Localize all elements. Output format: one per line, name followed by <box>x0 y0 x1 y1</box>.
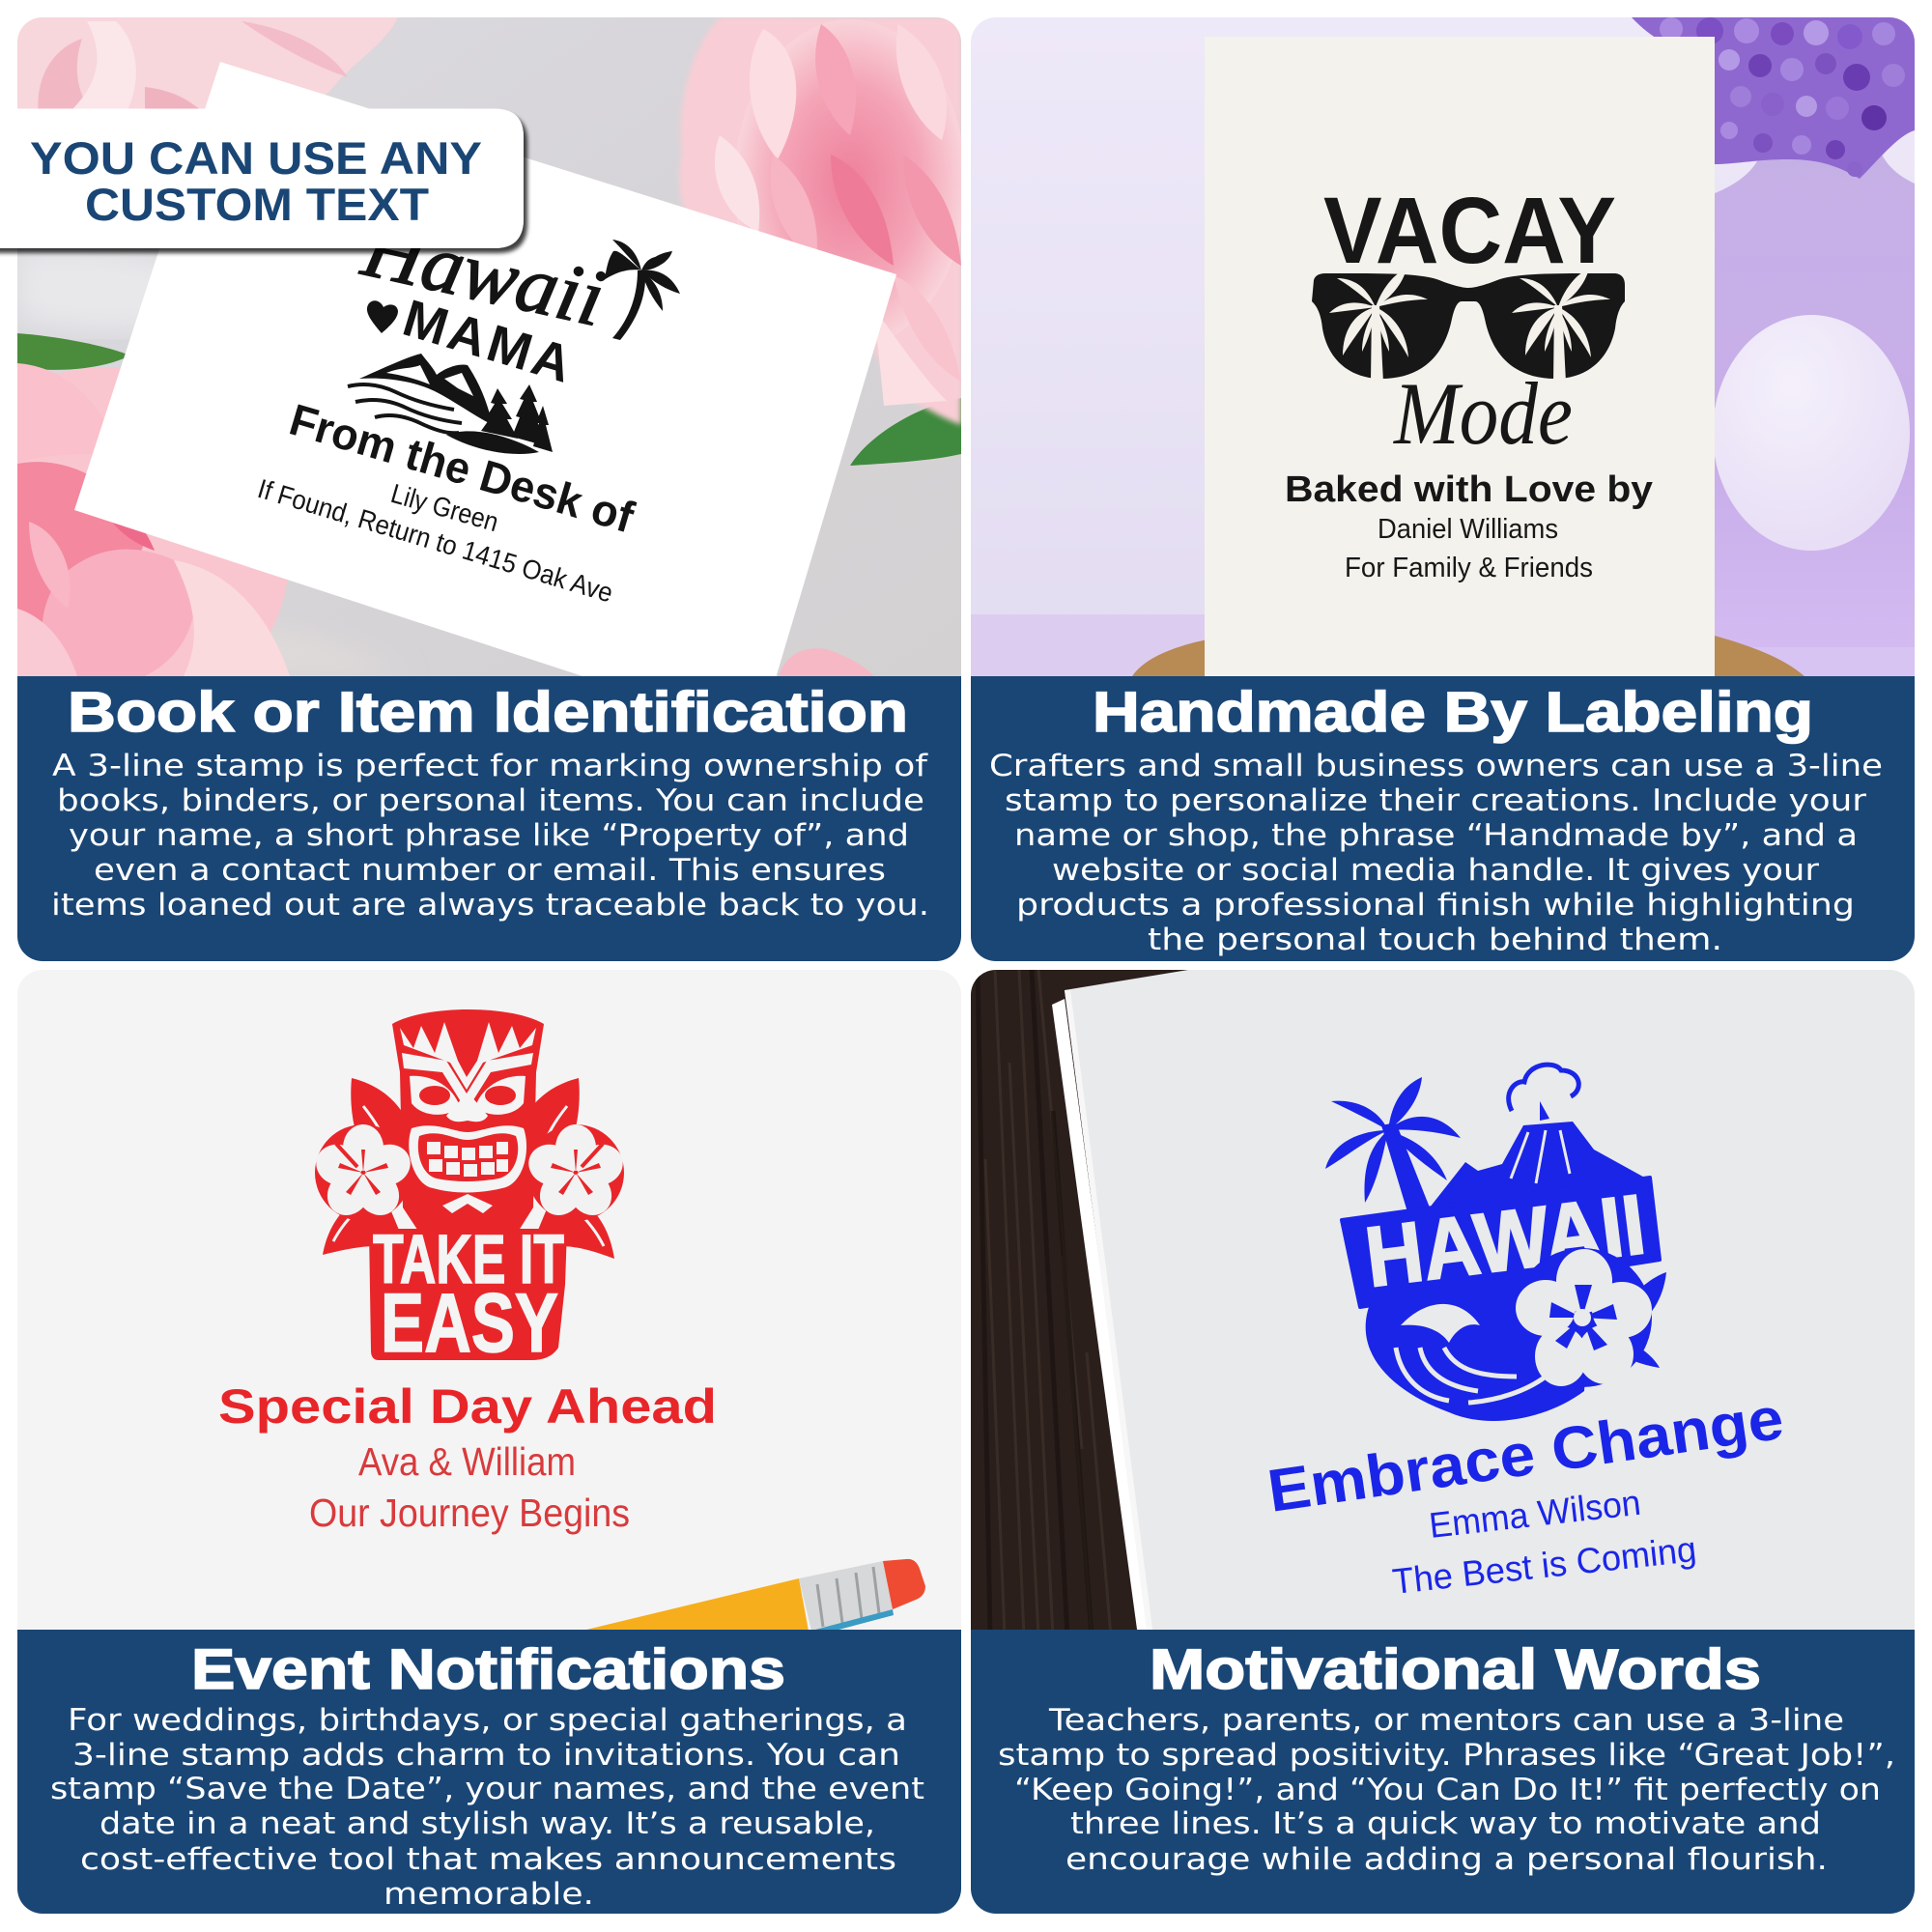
white stamped card <box>74 62 896 688</box>
stamp line: Embrace Change: Embrace Change <box>1264 1385 1787 1525</box>
stamp line: Lily Green: Lily Green <box>387 478 501 537</box>
stamp line: Our Journey Begins: Our Journey Begins <box>309 1491 630 1535</box>
word VACAY: VACAY <box>1323 178 1616 283</box>
body text <box>998 1703 1895 1877</box>
caption band <box>971 1630 1915 1915</box>
tiki mask icon <box>311 1009 628 1370</box>
script word Hawaii: Hawaii <box>355 204 612 344</box>
nose <box>446 1096 488 1122</box>
volcano smoke icon <box>1509 1065 1578 1111</box>
photo: peonies and stamped card <box>17 17 961 676</box>
photo: paper with pencil <box>17 970 961 1636</box>
mouth <box>409 1125 526 1192</box>
body text: stamp to spread positivity. Phrases like “Great Job!”, <box>998 1738 1895 1773</box>
top-right peony <box>679 17 961 425</box>
heading: Motivational Words <box>1150 1638 1761 1701</box>
head <box>392 1009 544 1241</box>
body text: A 3-line stamp is perfect for marking ownership of <box>52 749 928 783</box>
leaves <box>351 1078 415 1188</box>
stamp impression: Hawaii <box>1264 1065 1787 1602</box>
stamp impression: Vacay Mode <box>1285 178 1653 583</box>
photo: paper on dark wood <box>971 966 1927 1636</box>
stamp line: Special Day Ahead: Special Day Ahead <box>218 1379 717 1434</box>
stamp line: If Found: If Found, Return to 1415 Oak Ave <box>254 473 616 609</box>
palm tree icon <box>1325 1077 1461 1215</box>
body text: “Keep Going!”, and “You Can Do It!” fit perfectly on <box>1014 1773 1881 1807</box>
body text: 3-line stamp adds charm to invitations. You can <box>72 1738 900 1773</box>
body text: name or shop, the phrase “Handmade by”, and a <box>1014 818 1858 853</box>
panel: handmade by labeling <box>971 17 1915 961</box>
body text: books, binders, or personal items. You can include <box>57 783 924 818</box>
body text: your name, a short phrase like “Property of”, and <box>69 818 909 853</box>
photo: vase, flowers and canvas <box>971 17 1915 684</box>
pencil icon <box>586 1559 925 1630</box>
volcano icon <box>1430 1122 1650 1236</box>
stamp impression: Take It Easy tiki <box>218 1009 717 1535</box>
stamp line: Ava and William: Ava & William <box>358 1439 576 1484</box>
lower-left peony <box>17 367 288 676</box>
word HAWAII: HAWAII <box>1360 1176 1650 1305</box>
hair spikes <box>400 1022 536 1090</box>
body text: stamp to personalize their creations. Include your <box>1005 783 1866 818</box>
callout: you can use any custom text: CUSTOM TEXT <box>85 179 429 230</box>
caption band <box>17 676 961 961</box>
body text: website or social media handle. It gives your <box>1052 853 1819 888</box>
body text <box>50 1703 924 1912</box>
stamp line: Daniel Williams: Daniel Williams <box>1378 514 1558 545</box>
purple flowers <box>1632 17 1915 179</box>
body text: encourage while adding a personal flourish. <box>1065 1842 1828 1877</box>
panel: motivational words <box>971 966 1927 1915</box>
body text: stamp “Save the Date”, your names, and the event <box>50 1772 924 1806</box>
panel: book or item identification <box>0 17 966 961</box>
heading: Event Notifications <box>191 1638 785 1701</box>
body text: three lines. It’s a quick way to motivate and <box>1070 1806 1821 1841</box>
body text: Teachers, parents, or mentors can use a 3-line <box>1048 1703 1844 1738</box>
stamp line: For Family and Friends: For Family & Friends <box>1345 553 1593 583</box>
word TAKE IT: TAKE IT <box>373 1222 564 1298</box>
script word Mode: Mode <box>1392 364 1573 463</box>
stamp line: From the Desk of: From the Desk of <box>284 394 640 543</box>
body text: For weddings, birthdays, or special gatherings, a <box>68 1703 907 1738</box>
stamp impression: Hawaii Mama <box>258 240 680 601</box>
body text <box>989 749 1883 957</box>
stamp line: Baked with Love by: Baked with Love by <box>1285 469 1653 510</box>
body text: memorable. <box>384 1877 594 1912</box>
caption band <box>17 1630 961 1915</box>
top-left peony <box>17 17 398 119</box>
green leaves <box>17 333 130 370</box>
hibiscus flower icon <box>1513 1248 1666 1406</box>
callout: you can use any custom text <box>0 108 524 248</box>
body text: the personal touch behind them. <box>1148 923 1722 957</box>
body text: items loaned out are always traceable back to you. <box>51 888 929 923</box>
mountain and trees icon <box>348 354 553 454</box>
small bottom-right flower <box>779 648 874 676</box>
word EASY: EASY <box>381 1277 558 1370</box>
text plate <box>369 1229 567 1360</box>
Hawaii banner <box>1342 1178 1660 1307</box>
stamp line: The Best is Coming: The Best is Coming <box>1390 1529 1698 1602</box>
hibiscus flowers <box>311 1124 415 1224</box>
body text: date in a neat and stylish way. It’s a reusable, <box>99 1806 875 1841</box>
palm tree icon <box>604 240 680 340</box>
sunglasses icon <box>1312 269 1625 383</box>
word MAMA: MAMA <box>397 289 578 394</box>
body text: Crafters and small business owners can use a 3-line <box>989 749 1883 783</box>
body text <box>51 749 929 923</box>
eyes <box>410 1076 460 1115</box>
heading: Book or Item Identification <box>68 681 908 744</box>
stamp line: Emma Wilson: Emma Wilson <box>1427 1483 1643 1546</box>
panel: event notifications <box>17 970 961 1915</box>
purple vase <box>1715 145 1915 681</box>
heart icon <box>367 300 398 333</box>
canvas <box>1205 37 1715 684</box>
heading: Handmade By Labeling <box>1093 681 1813 744</box>
body text: even a contact number or email. This ensures <box>94 853 886 888</box>
callout: you can use any custom text: YOU CAN USE ANY <box>30 132 482 184</box>
body text: products a professional finish while highlighting <box>1016 888 1855 923</box>
wooden tray <box>1132 639 1208 676</box>
wave icon <box>1366 1256 1594 1421</box>
body text: cost-effective tool that makes announcements <box>80 1842 896 1877</box>
caption band <box>971 676 1915 961</box>
